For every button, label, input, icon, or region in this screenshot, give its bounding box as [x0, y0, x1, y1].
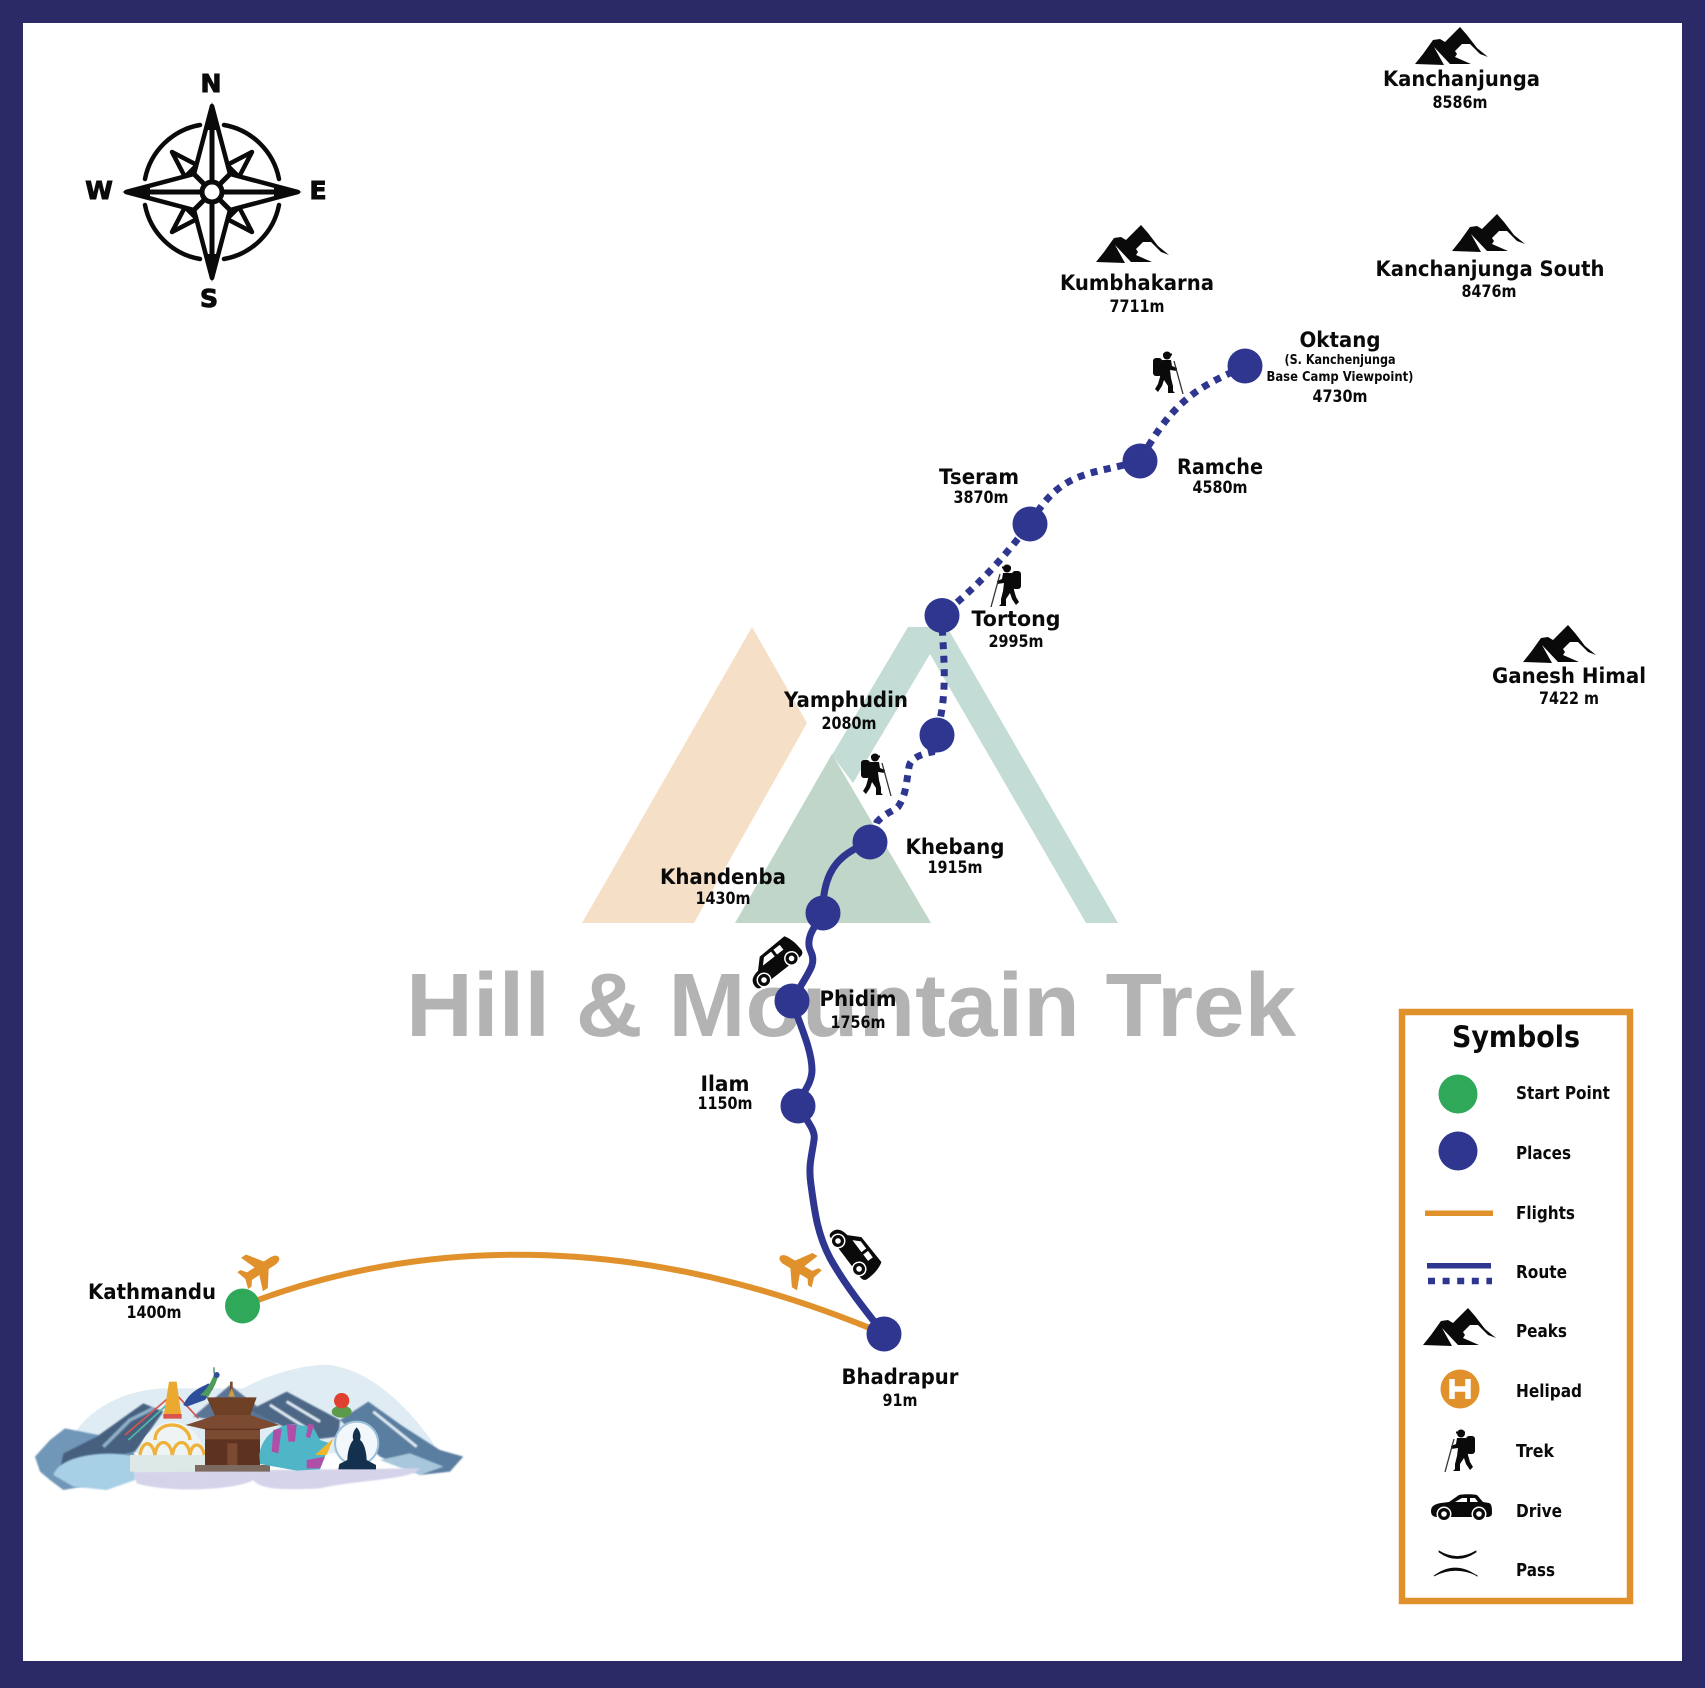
peak: Kanchanjunga South [1376, 214, 1604, 301]
label: Kathmandu: Kathmandu [88, 1280, 216, 1305]
icon: car near Phidim [742, 933, 806, 993]
icon: car near Bhadrapur [825, 1219, 884, 1284]
legend row: flights [1425, 1203, 1575, 1224]
label: Khandenba: Khandenba [660, 865, 786, 890]
label: Oktang: Base Camp Viewpoint) [1266, 369, 1414, 385]
label: Ilam: Ilam [700, 1072, 750, 1097]
clouds [53, 1454, 420, 1490]
legend title: Symbols [1452, 1020, 1580, 1054]
stop: Khebang [852, 824, 888, 860]
stop: Tortong [924, 598, 960, 633]
pale sky hills [77, 1365, 433, 1453]
stop: Ilam [780, 1088, 816, 1124]
stop: Khandenba [806, 896, 840, 930]
peak: Kanchanjunga South: 8476m [1462, 282, 1516, 301]
label: Khandenba: 1430m [696, 889, 750, 908]
label: Phidim: Phidim [820, 987, 896, 1012]
stop: Yamphudin [920, 718, 954, 752]
label: Khebang [906, 835, 1004, 877]
logo: peach mountain [582, 627, 807, 923]
icon: plane near Bhadrapur [770, 1240, 827, 1296]
label: Tortong: Tortong [972, 607, 1060, 632]
label: Kathmandu [88, 1280, 216, 1322]
peak: Kumbhakarna: Kumbhakarna [1060, 271, 1214, 296]
label: Tseram [939, 465, 1019, 507]
watermark logo: Hill & Mountain Trek [406, 627, 1297, 1056]
label: Khebang: 1915m [928, 858, 982, 877]
peak: Ganesh Himal: Ganesh Himal [1492, 664, 1646, 689]
legend row: start point [1438, 1074, 1610, 1114]
legend frame [1402, 1012, 1630, 1601]
label: Kathmandu: 1400m [126, 1303, 182, 1322]
icon: trekker near Oktang [1153, 352, 1183, 394]
legend row: pass [1434, 1551, 1555, 1581]
label: Phidim: 1756m [830, 1013, 886, 1032]
logo: green mountain [735, 754, 931, 923]
compass letters: N [201, 69, 221, 98]
flight route [242, 1255, 884, 1334]
peak: Ganesh Himal [1492, 625, 1646, 708]
trek route [870, 366, 1245, 842]
illustration: Nepal landmarks [35, 1365, 463, 1490]
legend row: start point: Start Point [1516, 1083, 1610, 1104]
label: Tseram: 3870m [954, 488, 1008, 507]
legend row: places [1438, 1132, 1571, 1170]
legend row: trek [1445, 1430, 1555, 1472]
legend row: helipad: Helipad [1516, 1381, 1582, 1402]
peak: Kanchanjunga [1383, 27, 1540, 112]
label: Ilam: 1150m [698, 1094, 752, 1113]
label: Yamphudin [783, 688, 908, 733]
rhododendron flower [332, 1393, 352, 1418]
label: Tseram: Tseram [939, 465, 1019, 490]
stop: Ramche [1122, 444, 1158, 478]
drive route [792, 842, 884, 1334]
label: Bhadrapur [842, 1365, 959, 1410]
stop: Tseram [1012, 506, 1048, 542]
label: Yamphudin: 2080m [822, 714, 876, 733]
label: Yamphudin: Yamphudin [783, 688, 908, 713]
start: Kathmandu [225, 1288, 260, 1324]
legend row: peaks: Peaks [1516, 1321, 1567, 1342]
rhino [259, 1423, 333, 1471]
label: Tortong [972, 607, 1060, 651]
stupa [125, 1382, 205, 1472]
label: Phidim [820, 987, 896, 1032]
label: Oktang: (S. Kanchenjunga [1284, 352, 1396, 368]
watermark text: Hill & Mountain Trek [406, 956, 1297, 1056]
label: Khandenba [660, 865, 786, 908]
compass letters: S [200, 284, 218, 313]
label: Ramche: 4580m [1192, 478, 1248, 497]
compass letters: E [309, 176, 327, 205]
stop: Phidim [774, 984, 810, 1018]
label: Ramche [1177, 455, 1263, 497]
label: Oktang [1266, 328, 1414, 406]
peacock [183, 1367, 220, 1407]
legend row: pass: Pass [1516, 1560, 1555, 1581]
label: Oktang: Oktang [1300, 328, 1380, 353]
legend: Symbols [1402, 1012, 1630, 1601]
label: Bhadrapur: Bhadrapur [842, 1365, 959, 1390]
icon: trekker near Yamphudin [861, 754, 891, 796]
legend row: drive: Drive [1516, 1501, 1562, 1522]
peak: Kumbhakarna: 7711m [1110, 297, 1164, 316]
peak: Kumbhakarna [1060, 225, 1214, 316]
legend row: trek: Trek [1516, 1441, 1555, 1462]
compass letters [85, 69, 327, 313]
icon: plane near Kathmandu [232, 1240, 290, 1297]
legend row: places: Places [1516, 1143, 1571, 1164]
legend row: peaks [1423, 1308, 1567, 1346]
label: Ilam [698, 1072, 752, 1113]
stop: Bhadrapur [866, 1316, 902, 1352]
compass letters: W [85, 176, 113, 205]
buddha [335, 1422, 378, 1469]
legend row: flights: Flights [1516, 1203, 1575, 1224]
mountains [35, 1385, 463, 1490]
peak: Kanchanjunga: 8586m [1432, 93, 1488, 112]
legend row: drive [1431, 1494, 1562, 1522]
label: Bhadrapur: 91m [882, 1391, 918, 1410]
legend row: helipad [1440, 1370, 1582, 1408]
temple [186, 1382, 279, 1472]
peak: Kanchanjunga South: Kanchanjunga South [1376, 257, 1604, 282]
logo: teal mountain band [832, 627, 1118, 923]
legend row: route: Route [1516, 1262, 1567, 1283]
route stops [225, 348, 1262, 1352]
label: Ramche: Ramche [1177, 455, 1263, 480]
label: Oktang: 4730m [1312, 387, 1368, 406]
icon: trekker near Tortong [991, 564, 1021, 607]
compass rose [122, 102, 302, 282]
label: Khebang: Khebang [906, 835, 1004, 860]
peak: Ganesh Himal: 7422 m [1539, 689, 1599, 708]
legend row: route [1427, 1262, 1567, 1283]
label: Tortong: 2995m [988, 632, 1044, 651]
peak: Kanchanjunga: Kanchanjunga [1383, 67, 1540, 92]
stop: Oktang [1228, 348, 1262, 384]
